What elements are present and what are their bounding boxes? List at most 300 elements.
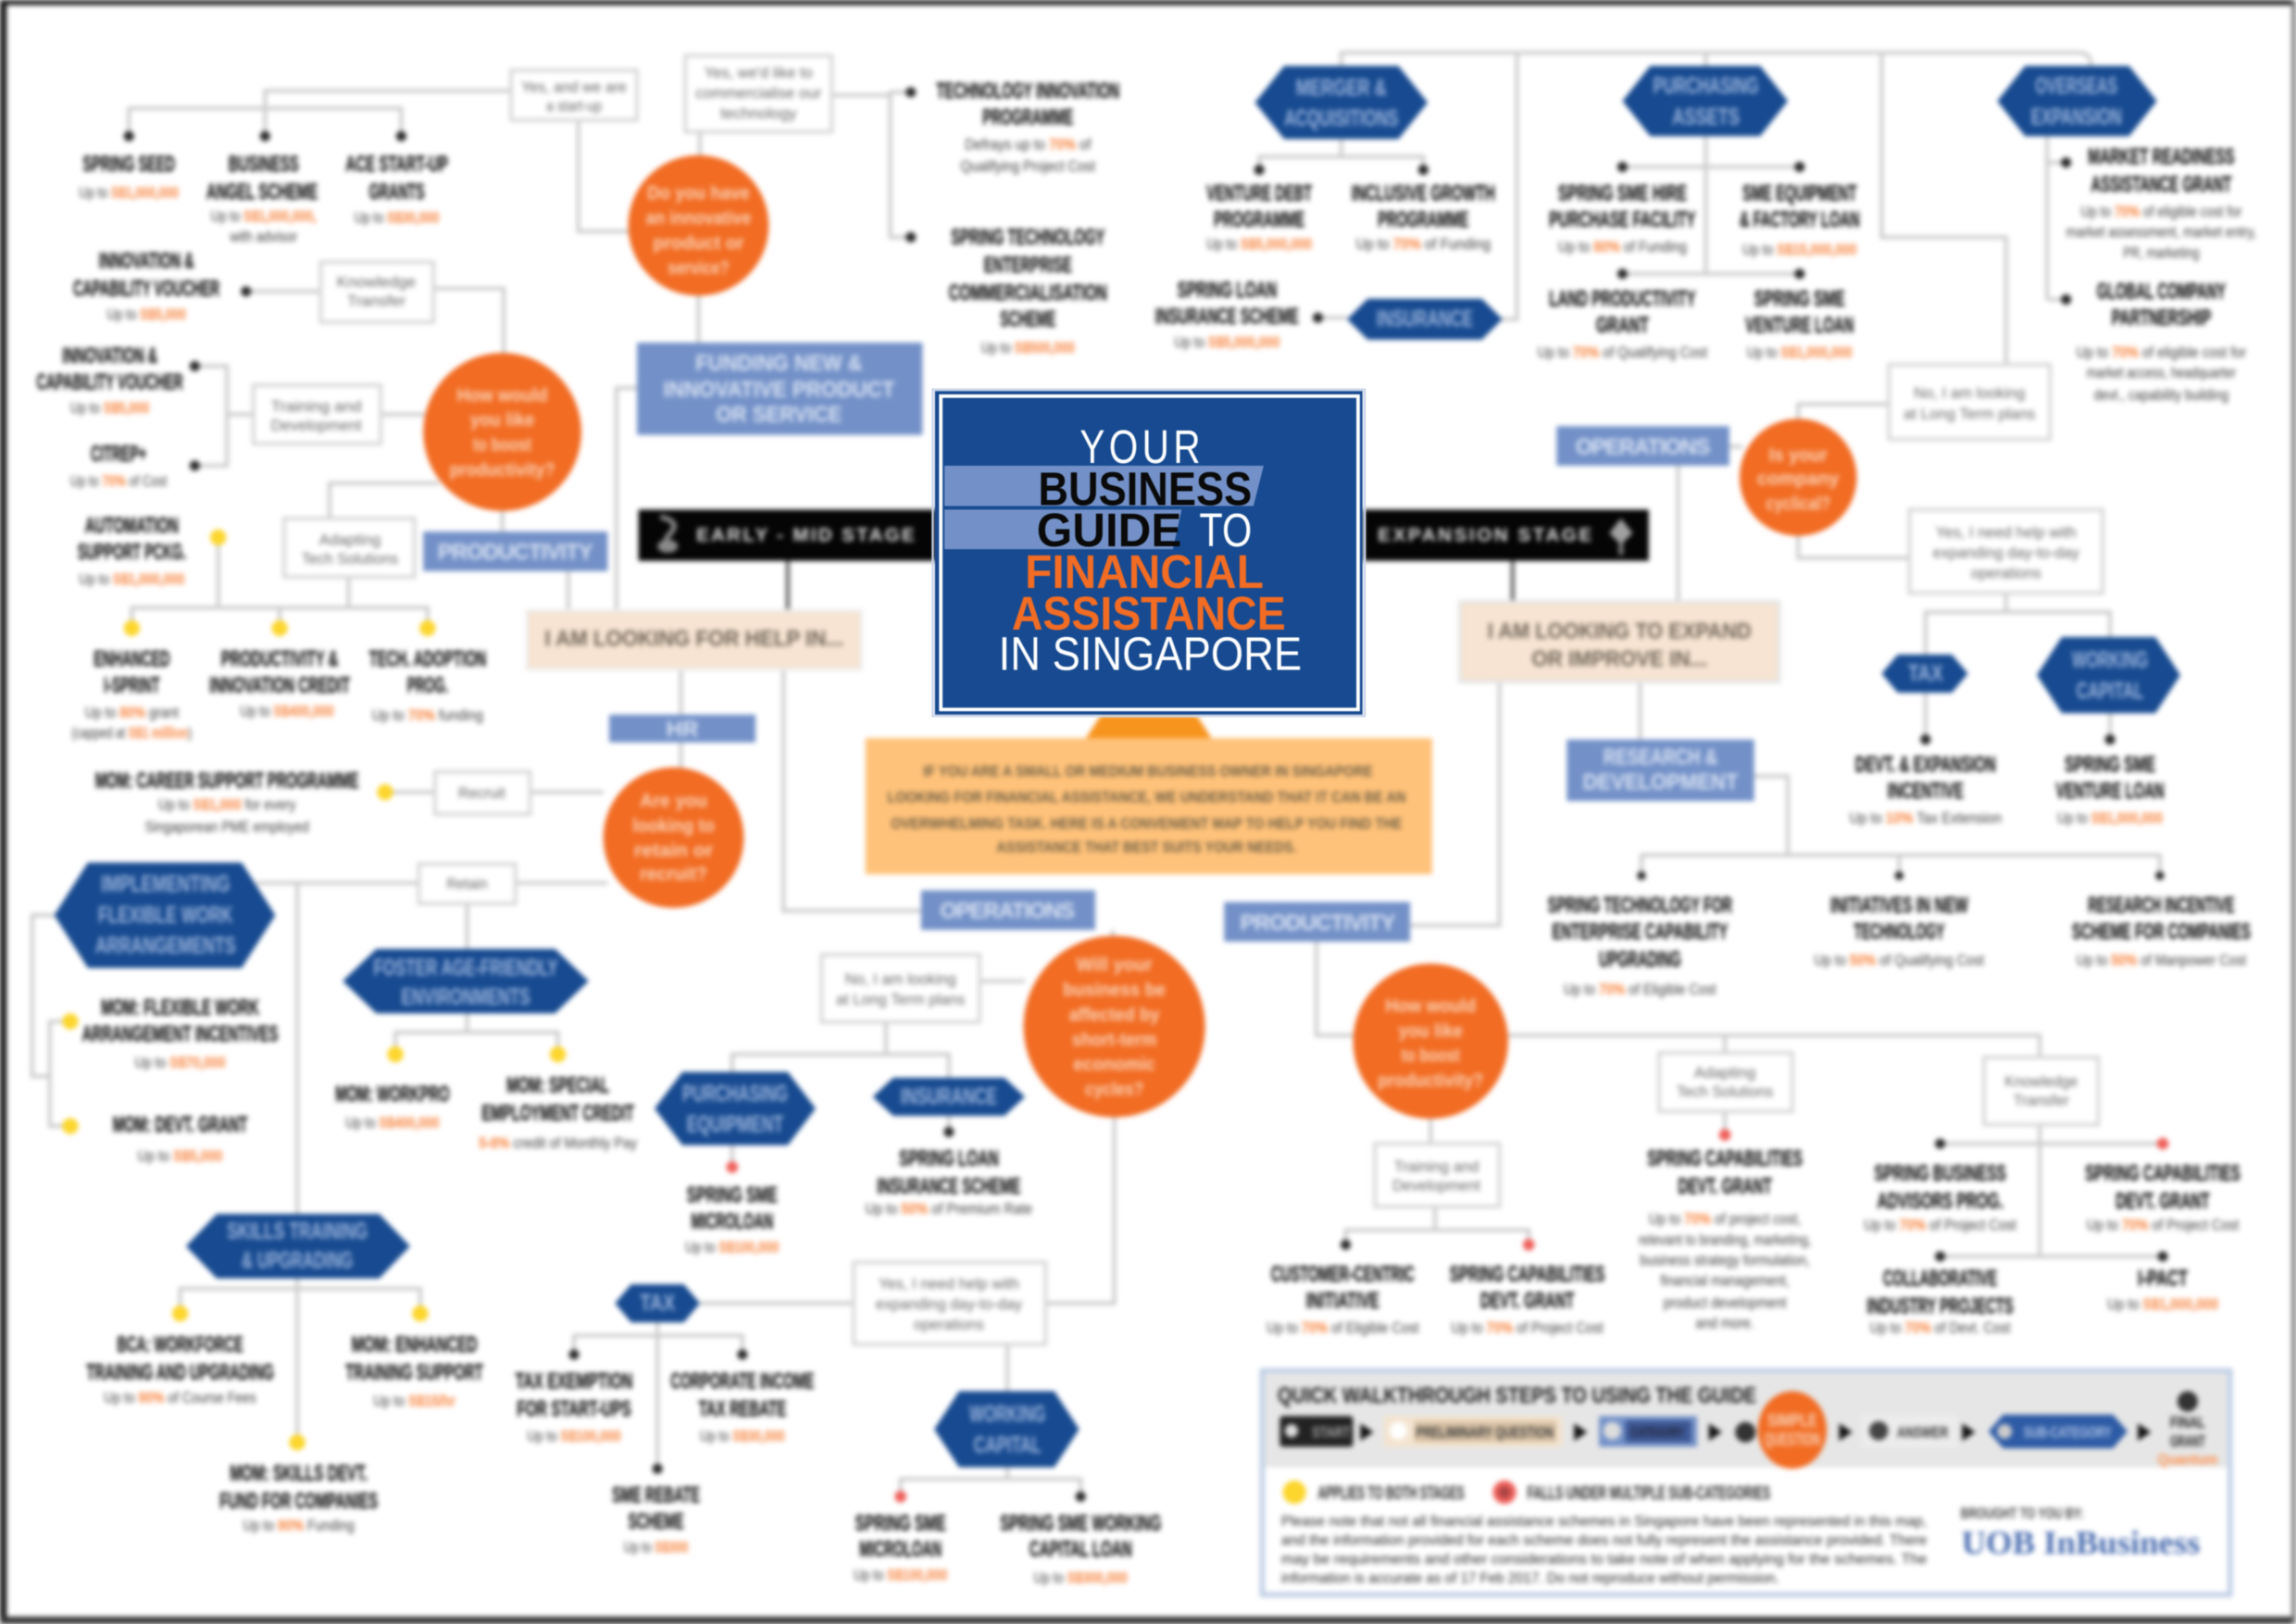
scheme: market readiness: Up to 70% of eligible cost for: [2080, 203, 2242, 220]
panel: long term plans right: at Long Term plans: [1903, 405, 2035, 422]
scheme: market readiness: [2061, 145, 2256, 261]
scheme: collaborative industry projects: INDUSTRY PROJECTS: [1867, 1295, 2014, 1319]
scheme: spring capabilities 2: relevant to branding, marketing,: [1639, 1230, 1811, 1248]
question: boost productivity: you like: [470, 409, 534, 431]
hexagon: purchasing assets: PURCHASING: [1653, 74, 1759, 99]
scheme: global company partnership: Up to 70% of eligible cost for: [2077, 344, 2247, 361]
walkthrough title: QUICK WALKTHROUGH STEPS TO USING THE GUIDE: [1278, 1384, 1756, 1408]
panel: adapting tech solutions: Tech Solutions: [302, 550, 398, 568]
scheme: citrep: CITREP+: [91, 443, 146, 467]
panel: yes start-up box: [511, 70, 637, 120]
scheme: bca workforce: [86, 1305, 274, 1406]
title: guide: GUIDE: [1037, 504, 1181, 556]
scheme: inclusive growth: Up to 70% of Funding: [1356, 235, 1491, 253]
scheme: inclusive growth: INCLUSIVE GROWTH: [1352, 182, 1495, 206]
scheme: innovation voucher 1: INNOVATION &: [99, 249, 194, 273]
hexagon: implementing flexible work: ARRANGEMENTS: [95, 934, 236, 959]
panel: hr: HR: [667, 718, 698, 743]
scheme: sme equipment and factory loan: [1740, 162, 1860, 258]
panel: research and development: RESEARCH &: [1603, 746, 1717, 770]
panel: adapting tech solutions right: Adapting: [1694, 1064, 1755, 1081]
scheme: devt and expansion incentive: INCENTIVE: [1888, 780, 1964, 804]
step: final grant: FINAL: [2170, 1413, 2205, 1431]
scheme: mom workpro: MOM: WORKPRO: [335, 1082, 450, 1106]
scheme: spring business advisors: ADVISORS PROG.: [1878, 1190, 2003, 1214]
question: cyclical: [1740, 418, 1856, 536]
panel: productivity expansion stage: PRODUCTIVITY: [1241, 911, 1395, 935]
scheme: spring technology upgrading: ENTERPRISE CAPABILITY: [1553, 920, 1728, 944]
panel: long term plans left: No, I am looking: [845, 970, 956, 988]
hexagon: merger and acquisitions: ACQUISITIONS: [1284, 106, 1398, 131]
scheme: spring technology enterprise commercialisation: Up to S$500,000: [981, 339, 1075, 356]
trapezoid: connector to intro: [1085, 715, 1213, 740]
scheme: corporate income tax rebate: CORPORATE INCOME: [670, 1369, 814, 1393]
question: cyclical: Is your: [1769, 444, 1828, 466]
hexagon: insurance right: [1347, 299, 1503, 340]
question: innovative product: [629, 156, 768, 295]
scheme: business angel: [206, 131, 318, 245]
scheme: tax exemption: Up to S$100,000: [527, 1427, 621, 1444]
scheme: i-pact: Up to S$1,000,000: [2107, 1295, 2218, 1313]
scheme: enhanced i-sprint: Up to 80% grant: [85, 704, 179, 721]
scheme: spring sme working capital: [1000, 1492, 1161, 1587]
scheme: spring technology enterprise commercialisation: [949, 226, 1107, 356]
question: boost productivity expansion: How would: [1385, 995, 1476, 1017]
hexagon: age friendly: [343, 949, 589, 1013]
panel: productivity early stage: PRODUCTIVITY: [438, 541, 593, 565]
panel: training and development: Development: [271, 417, 362, 434]
scheme: spring sme venture loan 1: Up to S$1,000,000: [1747, 344, 1853, 361]
dots: right of commercialise box: [905, 87, 916, 243]
scheme: spring capabilities 2: financial management,: [1661, 1272, 1790, 1290]
hexagon: merger and acquisitions: MERGER &: [1296, 76, 1387, 101]
scheme: spring loan insurance 2: Up to S$5,000,000: [1174, 333, 1279, 351]
scheme: automation support: SUPPORT PCKG.: [78, 541, 186, 565]
step: sub-category: [1989, 1415, 2151, 1448]
scheme: ace start-up grants: [345, 131, 448, 226]
scheme: spring sme microloan 1: Up to S$100,000: [685, 1238, 779, 1255]
question: cyclical: cyclical?: [1766, 493, 1830, 514]
panel: retain: Retain: [446, 875, 488, 893]
panel: long term plans left: [821, 955, 980, 1022]
scheme: corporate income tax rebate: TAX REBATE: [698, 1397, 786, 1421]
panel: yes start-up box: Yes, and we are: [521, 79, 627, 96]
question: boost productivity: to boost: [473, 434, 531, 456]
hexagon: overseas expansion: EXPANSION: [2031, 105, 2122, 130]
disclaimer note: Please note that not all financial assistance schemes in Singapore have been represented in this map,: [1281, 1514, 1927, 1530]
scheme: technology innovation programme: PROGRAMME: [982, 106, 1073, 130]
step: final grant: [2158, 1392, 2217, 1468]
scheme: spring sme hire purchase: PURCHASE FACILITY: [1549, 208, 1696, 232]
panel: quick walkthrough and notes: [1262, 1370, 2230, 1594]
scheme: tax exemption: TAX EXEMPTION: [516, 1369, 632, 1393]
scheme: customer-centric: Up to 70% of Eligible Cost: [1267, 1318, 1419, 1336]
scheme: spring technology enterprise commercialisation: SCHEME: [1000, 308, 1055, 332]
step: category: CATEGORY: [1631, 1425, 1684, 1441]
scheme: mom enhanced training: MOM: ENHANCED: [352, 1333, 478, 1357]
panel: looking to expand: I AM LOOKING TO EXPAND: [1488, 620, 1752, 644]
step: answer: [1861, 1415, 1976, 1448]
scheme: sme rebate: Up to S$300: [624, 1539, 688, 1556]
question: retain or recruit: looking to: [632, 815, 715, 836]
scheme: spring capabilities 3: [2085, 1138, 2240, 1234]
scheme: mom career support: [95, 769, 393, 835]
panel: funding new and innovative: INNOVATIVE PRODUCT: [663, 379, 895, 403]
panel: adapting tech solutions right: [1659, 1053, 1792, 1111]
scheme: land productivity grant: Up to 70% of Qualifying Cost: [1538, 344, 1708, 361]
question: boost productivity expansion: to boost: [1402, 1045, 1460, 1067]
title: your: YOUR: [1079, 421, 1204, 473]
hexagon: working capital left: CAPITAL: [974, 1433, 1042, 1458]
scheme: spring loan insurance 2: [1155, 279, 1323, 351]
scheme: mom flexible work: [62, 996, 279, 1071]
panel: funding new and innovative: OR SERVICE: [716, 404, 842, 428]
scheme: spring capabilities 2: and more.: [1696, 1315, 1754, 1332]
scheme: mom career support: Singaporean PME employed: [145, 818, 309, 835]
question: economic cycles: business be: [1063, 979, 1166, 1000]
step: preliminary question: [1384, 1416, 1587, 1447]
scheme: global company partnership: devt., capability building: [2094, 386, 2228, 404]
panel: commercialise box: commercialise our: [695, 84, 822, 102]
scheme: mom skills devt fund: MOM: SKILLS DEVT.: [230, 1462, 368, 1486]
scheme: spring sme working capital: Up to S$300,000: [1034, 1569, 1128, 1587]
question: innovative product: product or: [653, 232, 743, 254]
disclaimer note: [1281, 1514, 1928, 1587]
scheme: mom special employment: EMPLOYMENT CREDIT: [481, 1102, 634, 1126]
scheme: business angel: Up to S$1,000,000,: [211, 207, 317, 225]
step: start: [1279, 1416, 1374, 1447]
stage bar: expansion: EXPANSION STAGE: [1378, 524, 1591, 545]
scheme: tech adoption: PROG.: [407, 674, 448, 698]
scheme: enhanced i-sprint: I-SPRINT: [104, 674, 160, 698]
scheme: customer-centric: [1267, 1240, 1419, 1336]
scheme: innovation voucher 2: [37, 344, 200, 417]
hexagon: purchasing assets: [1622, 66, 1788, 136]
scheme: global company partnership: PARTNERSHIP: [2112, 306, 2211, 331]
panel: recruit: Recruit: [458, 784, 505, 802]
scheme: market readiness: PR, marketing: [2123, 244, 2200, 261]
scheme: automation support: [78, 515, 226, 588]
scheme: ace start-up grants: Up to S$30,000: [355, 208, 440, 226]
scheme: corporate income tax rebate: Up to S$30,000: [700, 1427, 785, 1444]
scheme: technology innovation programme: Defrays up to 70% of: [965, 135, 1092, 153]
stage bar: early to mid: EARLY - MID STAGE: [696, 524, 915, 545]
question: economic cycles: short-term: [1072, 1029, 1156, 1050]
scheme: spring sme microloan 1: MICROLOAN: [692, 1210, 773, 1234]
stage bar: expansion: [1363, 509, 1649, 561]
scheme: collaborative industry projects: [1867, 1251, 2014, 1336]
scheme: spring capabilities 1: [1450, 1239, 1604, 1336]
hexagon: overseas expansion: [1997, 66, 2157, 136]
panel: training and development: Training and: [271, 397, 362, 415]
scheme: innovation voucher 2: CAPABILITY VOUCHER: [37, 371, 183, 395]
step: final grant: Quantum: [2158, 1453, 2217, 1468]
panel: hr: [609, 715, 755, 743]
step: final grant: GRANT: [2170, 1432, 2205, 1451]
scheme: spring technology enterprise commercialisation: ENTERPRISE: [984, 254, 1072, 278]
question: economic cycles: [1024, 936, 1205, 1118]
scheme: tax exemption: [516, 1349, 632, 1444]
scheme: mom special employment: [479, 1046, 638, 1152]
question: economic cycles: economic: [1073, 1054, 1155, 1075]
panel: funding new and innovative: [637, 343, 922, 435]
panel: day to day left: expanding day-to-day: [876, 1295, 1023, 1313]
panel: productivity early stage: [423, 531, 607, 571]
panel: commercialise box: technology: [720, 105, 797, 122]
scheme: land productivity grant: GRANT: [1596, 314, 1649, 338]
scheme: mom devt grant: MOM: DEVT. GRANT: [113, 1114, 248, 1138]
hexagon: implementing flexible work: IMPLEMENTING: [101, 872, 230, 897]
scheme: mom skills devt fund: FUND FOR COMPANIES: [219, 1490, 378, 1514]
scheme: spring sme microloan 2: [854, 1491, 947, 1584]
scheme: enhanced i-sprint: (capped at S$1 million): [72, 724, 192, 742]
title: assistance: ASSISTANCE: [1012, 587, 1286, 640]
scheme: citrep: Up to 70% of Cost: [70, 472, 168, 490]
scheme: sme rebate: SCHEME: [629, 1510, 684, 1534]
scheme: mom skills devt fund: [219, 1434, 378, 1534]
logo: uob inbusiness: UOB InBusiness: [1962, 1524, 2200, 1561]
scheme: land productivity grant: [1538, 269, 1708, 361]
panel: funding new and innovative: FUNDING NEW &: [695, 352, 863, 376]
disclaimer note: and the information provided for each scheme does not fully represent the assistance provided. There: [1281, 1533, 1928, 1549]
disclaimer note: information is accurate as of 17 Feb 2017. Do not reproduce without permission.: [1281, 1571, 1779, 1587]
scheme: sme rebate: SME REBATE: [612, 1484, 700, 1508]
scheme: collaborative industry projects: Up to 70% of Devt. Cost: [1870, 1318, 2011, 1336]
hexagon: purchasing equipment: [655, 1072, 816, 1145]
hexagon: age friendly: ENVIRONMENTS: [401, 985, 530, 1010]
scheme: market readiness: market assessment, market entry,: [2066, 223, 2256, 241]
panel: training and development right: [1375, 1143, 1500, 1206]
scheme: spring loan insurance 1: SPRING LOAN: [899, 1147, 999, 1171]
scheme: spring sme microloan 2: MICROLOAN: [859, 1538, 942, 1562]
scheme: spring loan insurance 1: Up to 50% of Premium Rate: [866, 1200, 1032, 1218]
scheme: devt and expansion incentive: [1850, 734, 2002, 827]
scheme: mom career support: MOM: CAREER SUPPORT PROGRAMME: [95, 769, 359, 793]
panel: knowledge transfer right: [1984, 1057, 2098, 1125]
title: to: TO: [1199, 504, 1252, 556]
hexagon: purchasing equipment: PURCHASING: [682, 1081, 788, 1106]
hexagon: age friendly: FOSTER AGE-FRIENDLY: [373, 956, 558, 981]
question: boost productivity expansion: you like: [1398, 1020, 1463, 1042]
scheme: spring technology enterprise commercialisation: COMMERCIALISATION: [949, 281, 1107, 306]
scheme: productivity and innovation credit: [209, 620, 350, 719]
scheme: global company partnership: [2061, 281, 2247, 404]
scheme: spring loan insurance 2: SPRING LOAN: [1178, 279, 1277, 303]
hexagon: skills training: SKILLS TRAINING: [227, 1219, 368, 1244]
panel: long term plans right: No, I am looking: [1914, 384, 2025, 402]
step: sub-category: SUB-CATEGORY: [2024, 1423, 2112, 1441]
scheme: spring capabilities 2: DEVT. GRANT: [1678, 1175, 1772, 1199]
hexagon: insurance right: INSURANCE: [1377, 307, 1473, 332]
hexagon: merger and acquisitions: [1254, 66, 1428, 139]
scheme: innovation voucher 2: Up to S$5,000: [70, 399, 149, 417]
scheme: sme equipment and factory loan: & FACTORY LOAN: [1740, 208, 1860, 232]
scheme: spring sme venture loan 1: VENTURE LOAN: [1745, 314, 1853, 338]
scheme: business angel: BUSINESS: [229, 153, 299, 177]
scheme: sme equipment and factory loan: SME EQUIPMENT: [1742, 182, 1857, 206]
scheme: automation support: AUTOMATION: [85, 515, 179, 539]
title panel: [933, 390, 1365, 716]
scheme: collaborative industry projects: COLLABORATIVE: [1883, 1268, 1997, 1292]
scheme: sme rebate: [612, 1464, 700, 1556]
hexagon: tax left: TAX: [640, 1292, 676, 1317]
scheme: spring capabilities 3: Up to 70% of Project Cost: [2087, 1217, 2240, 1234]
scheme: devt and expansion incentive: DEVT. & EXPANSION: [1855, 754, 1996, 778]
scheme: sme equipment and factory loan: Up to S$15,000,000: [1742, 241, 1856, 258]
question: boost productivity expansion: productivity?: [1378, 1070, 1483, 1092]
question: retain or recruit: recruit?: [640, 864, 707, 885]
scheme: inclusive growth: [1352, 165, 1495, 253]
scheme: ace start-up grants: GRANTS: [369, 181, 425, 205]
legend: both stages: APPLIES TO BOTH STAGES: [1317, 1482, 1465, 1504]
panel: operations early stage: OPERATIONS: [940, 900, 1075, 924]
question: retain or recruit: retain or: [634, 840, 713, 861]
hexagon: implementing flexible work: [55, 863, 275, 968]
scheme: spring loan insurance 1: INSURANCE SCHEME: [877, 1175, 1020, 1199]
panel: looking for help: [527, 611, 861, 669]
panel: training and development right: Development: [1392, 1177, 1480, 1194]
hexagon: tax right: TAX: [1908, 661, 1943, 686]
scheme: spring sme working capital: CAPITAL LOAN: [1029, 1538, 1132, 1562]
panel: knowledge transfer right: Knowledge: [2004, 1073, 2078, 1091]
panel: yes start-up box: a start-up: [546, 97, 602, 115]
title highlight bars: [944, 466, 1264, 549]
scheme: research incentive: Up to 50% of Manpower Cost: [2077, 951, 2247, 968]
scheme: spring sme venture loan 1: [1745, 269, 1853, 361]
scheme: mom special employment: 5-8% credit of Monthly Pay: [479, 1134, 638, 1152]
scheme: spring sme venture loan 2: SPRING SME: [2065, 754, 2155, 778]
scheme: spring business advisors: SPRING BUSINESS: [1874, 1162, 2006, 1186]
scheme: mom skills devt fund: Up to 90% Funding: [243, 1517, 355, 1534]
panel: operations early stage: [921, 891, 1095, 930]
hexagon: overseas expansion: OVERSEAS: [2035, 74, 2117, 99]
legend: both stages: [1283, 1480, 1465, 1504]
scheme: technology innovation programme: Qualifying Project Cost: [961, 157, 1095, 175]
scheme: spring seed: Up to S$1,000,000: [79, 184, 179, 202]
scheme: spring seed: [79, 131, 179, 202]
question: retain or recruit: [604, 768, 743, 908]
scheme: spring sme hire purchase: SPRING SME HIRE: [1558, 182, 1687, 206]
hexagon: purchasing equipment: EQUIPMENT: [687, 1113, 783, 1138]
scheme: spring capabilities 3: DEVT. GRANT: [2115, 1190, 2210, 1214]
brought to you by: BROUGHT TO YOU BY:: [1961, 1505, 2084, 1522]
scheme: spring sme venture loan 2: Up to S$1,000,000: [2057, 809, 2163, 827]
question: cyclical: company: [1757, 468, 1840, 490]
legend: multiple sub-categories: [1492, 1480, 1770, 1504]
scheme: mom career support: Up to S$1,000 for every: [158, 796, 296, 814]
title: business: BUSINESS: [1038, 463, 1252, 516]
panel: day to day right: expanding day-to-day: [1933, 544, 2080, 562]
scheme: spring sme venture loan 1: SPRING SME: [1754, 288, 1845, 312]
scheme: business angel: ANGEL SCHEME: [206, 181, 318, 205]
panel: knowledge transfer: Knowledge: [337, 273, 416, 291]
scheme: spring technology upgrading: Up to 70% of Eligible Cost: [1564, 981, 1716, 998]
hexagon: tax left: [615, 1284, 700, 1322]
scheme: spring technology upgrading: [1548, 871, 1732, 998]
panel: day to day right: Yes, I need help with: [1936, 523, 2077, 541]
panel: research and development: [1566, 740, 1754, 801]
scheme: business angel: with advisor: [230, 228, 297, 245]
scheme: spring sme hire purchase: Up to 80% of Funding: [1558, 238, 1687, 256]
stage bar: early to mid: [639, 509, 937, 561]
panel: intro text: IF YOU ARE A SMALL OR MEDIUM BUSINESS OWNER IN SINGAPORE: [923, 762, 1373, 780]
scheme: productivity and innovation credit: INNOVATION CREDIT: [209, 674, 350, 698]
scheme: spring capabilities 2: product development: [1664, 1293, 1787, 1311]
hexagon: insurance left: INSURANCE: [901, 1085, 997, 1110]
scheme: spring capabilities 2: business strategy formulation,: [1640, 1252, 1810, 1269]
scheme: bca workforce: BCA: WORKFORCE: [118, 1333, 243, 1357]
panel: intro text: OVERWHELMING TASK. HERE IS A CONVENIENT MAP TO HELP YOU FIND THE: [891, 815, 1402, 832]
question: boost productivity: How would: [456, 384, 548, 406]
scheme: mom workpro: [335, 1046, 450, 1131]
scheme: mom enhanced training: [345, 1305, 483, 1409]
scheme: spring sme microloan 1: [685, 1161, 779, 1255]
hexagon: working capital left: WORKING: [969, 1403, 1045, 1428]
scheme: spring sme microloan 2: Up to S$100,000: [854, 1567, 947, 1584]
title: in singapore: IN SINGAPORE: [999, 628, 1302, 681]
scheme: spring seed: SPRING SEED: [82, 153, 175, 177]
question: innovative product: Do you have: [647, 182, 750, 204]
scheme: corporate income tax rebate: [670, 1349, 814, 1444]
scheme: global company partnership: market access, headquarter: [2087, 364, 2236, 381]
scheme: customer-centric: INITIATIVE: [1306, 1289, 1379, 1313]
step: answer: ANSWER: [1897, 1423, 1948, 1441]
scheme: venture debt: PROGRAMME: [1214, 208, 1304, 232]
scheme: innovation voucher 1: Up to S$5,000: [106, 306, 186, 323]
scheme: spring capabilities 2: SPRING CAPABILITIES: [1647, 1147, 1803, 1171]
scheme: innovation voucher 2: INNOVATION &: [62, 344, 157, 369]
hexagon: insurance left: [873, 1078, 1025, 1116]
panel: operations expansion stage: [1556, 426, 1729, 466]
scheme: spring sme venture loan 2: [2056, 734, 2165, 827]
scheme: tech adoption: TECH. ADOPTION: [369, 648, 486, 672]
scheme: tech adoption: Up to 70% funding: [372, 706, 483, 724]
panel: intro text: [866, 738, 1432, 874]
scheme: mom flexible work: MOM: FLEXIBLE WORK: [101, 996, 259, 1020]
scheme: innovation voucher 1: CAPABILITY VOUCHER: [73, 277, 219, 301]
scheme: tax exemption: FOR START-UPS: [517, 1397, 631, 1421]
hexagon: tax right: [1881, 655, 1968, 693]
question: economic cycles: affected by: [1069, 1004, 1160, 1025]
scheme: mom special employment: MOM: SPECIAL: [506, 1074, 609, 1098]
scheme: spring capabilities 1: DEVT. GRANT: [1480, 1289, 1575, 1313]
step: question circle: SIMPLE: [1767, 1411, 1817, 1430]
scheme: spring capabilities 2: [1639, 1129, 1811, 1332]
panel: commercialise box: [685, 56, 831, 131]
scheme: technology innovation programme: [936, 80, 1119, 175]
scheme: mom devt grant: [62, 1114, 248, 1165]
panel: adapting tech solutions: [284, 518, 415, 577]
panel: looking to expand: OR IMPROVE IN...: [1531, 648, 1707, 672]
panel: day to day left: Yes, I need help with: [879, 1275, 1019, 1293]
panel: retain: [418, 864, 516, 904]
hexagon: skills training: [186, 1214, 410, 1279]
disclaimer note: may be requirements and other considerations to take note of when applying for the schemes. The: [1281, 1552, 1928, 1568]
step: question circle: [1735, 1392, 1853, 1468]
scheme: enhanced i-sprint: ENHANCED: [94, 648, 169, 672]
scheme: enhanced i-sprint: [72, 620, 192, 742]
hexagon: skills training: & UPGRADING: [242, 1249, 353, 1274]
scheme: mom devt grant: Up to S$5,000: [138, 1147, 222, 1165]
panel: adapting tech solutions: Adapting: [319, 531, 381, 548]
scheme: initiatives in new technology: Up to 50% of Qualifying Cost: [1815, 951, 1984, 968]
scheme: initiatives in new technology: TECHNOLOGY: [1853, 920, 1944, 944]
scheme: spring capabilities 1: SPRING CAPABILITIES: [1450, 1263, 1604, 1287]
panel: productivity expansion stage: [1224, 902, 1410, 942]
panel: day to day left: [854, 1262, 1045, 1344]
panel: day to day right: operations: [1971, 565, 2041, 582]
scheme: technology innovation programme: TECHNOLOGY INNOVATION: [936, 80, 1119, 104]
